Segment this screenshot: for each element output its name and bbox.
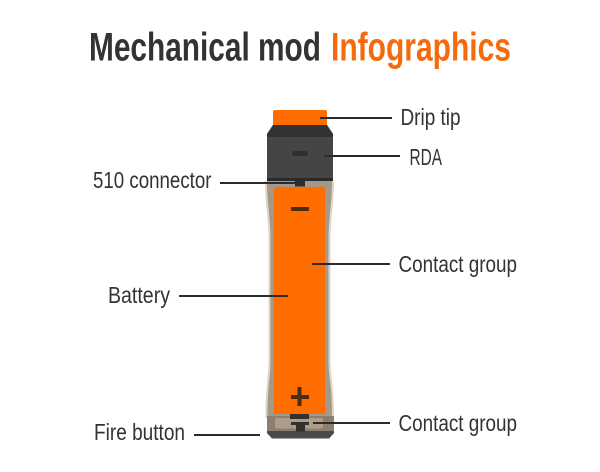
label: RDA: RDA [410, 144, 442, 170]
drip tip [273, 110, 327, 126]
fire button [291, 422, 309, 432]
RDA [267, 125, 333, 181]
plus sign [291, 387, 309, 406]
label: contact group lower: Contact group [398, 410, 517, 436]
label: 510 connector: 510 connector [93, 167, 212, 193]
mechanical mod device [265, 110, 334, 438]
label: fire button: Fire button [94, 419, 185, 445]
label: contact group upper: Contact group [398, 251, 517, 277]
label: RDA [324, 144, 442, 170]
510 connector [295, 180, 305, 186]
title: Mechanical mod [89, 26, 321, 70]
contact group base [267, 414, 334, 438]
minus sign [291, 207, 309, 211]
label: drip tip: Drip tip [400, 104, 460, 130]
battery [274, 187, 325, 414]
mod tube body [265, 181, 334, 418]
label: battery: Battery [108, 282, 170, 308]
title: Infographics [331, 26, 511, 70]
